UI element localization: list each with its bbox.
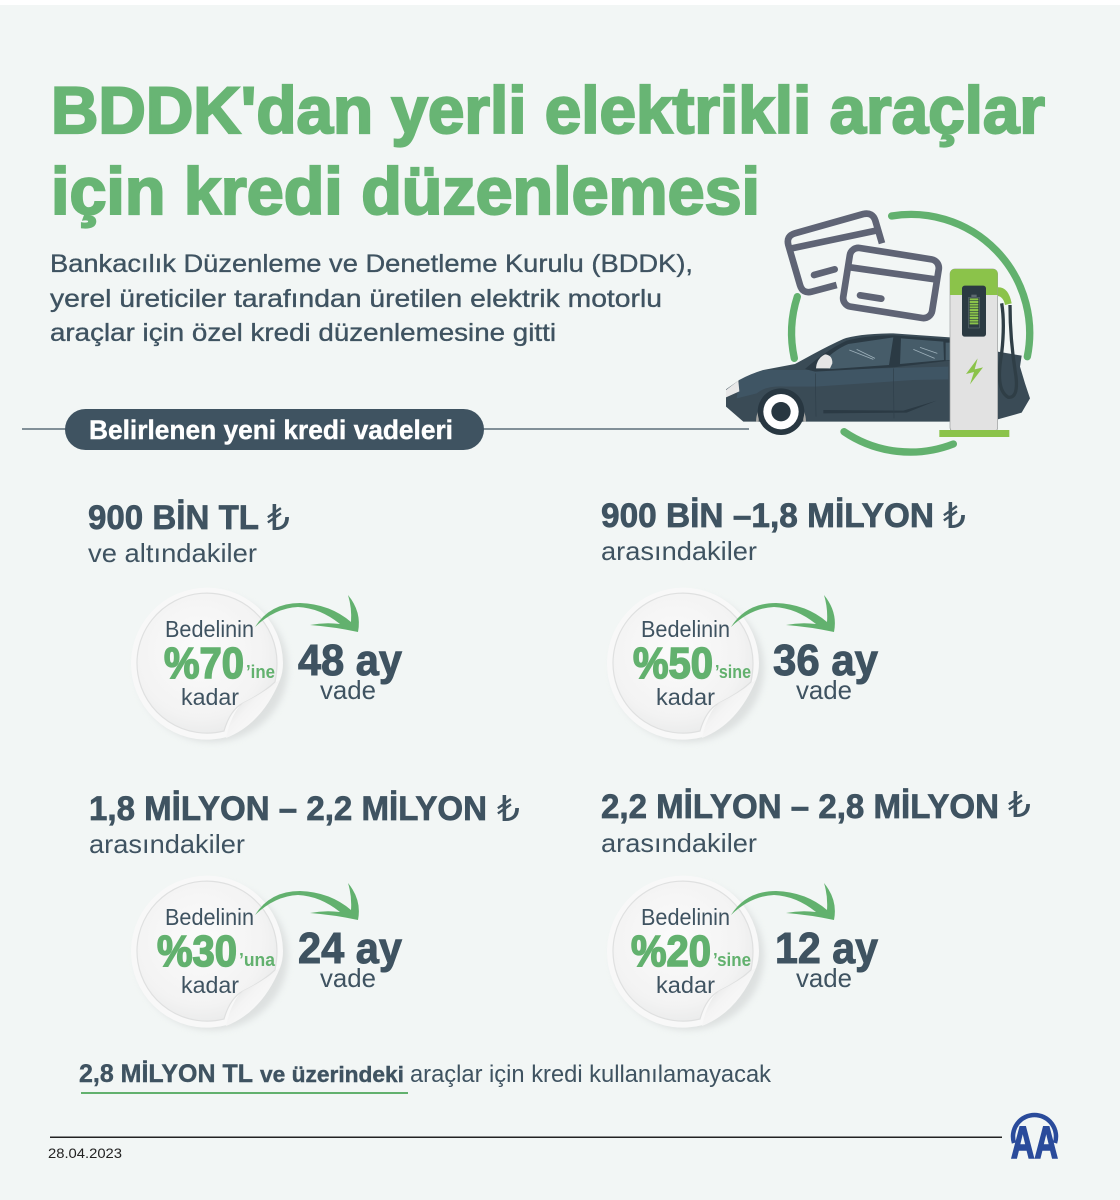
arrow (255, 883, 359, 920)
sticker badge: ’una (239, 950, 276, 970)
icon: green ring arcs (792, 214, 1030, 452)
sticker badge: Bedelinin (641, 616, 730, 642)
term: 12 ay (775, 924, 878, 973)
sticker badge: kadar (656, 684, 715, 710)
heading (88, 498, 290, 568)
heading: ₺ (1008, 785, 1031, 826)
sticker badge: ’sine (715, 662, 751, 682)
icon: hose (999, 303, 1016, 397)
icon: credit cards (788, 214, 940, 319)
heading (89, 789, 520, 859)
sticker badge: ’ine (246, 662, 275, 682)
heading: 900 BİN –1,8 MİLYON (601, 497, 934, 535)
sticker badge (607, 588, 764, 742)
term (773, 636, 879, 705)
term: vade (320, 963, 376, 993)
heading: ₺ (943, 496, 966, 537)
icon: charging station (939, 269, 1012, 437)
term: 48 ay (298, 636, 402, 685)
sticker badge: Bedelinin (641, 904, 730, 930)
heading: 1,8 MİLYON – 2,2 MİLYON (89, 790, 487, 828)
heading (601, 496, 966, 566)
sticker badge: %70 (164, 639, 244, 688)
sticker badge: kadar (181, 972, 239, 998)
term: vade (796, 963, 852, 993)
heading: ₺ (267, 498, 290, 539)
panel: 900 bin TL ve altı (88, 498, 402, 742)
intro text: yerel üreticiler tarafından üretilen elektrik motorlu (50, 285, 662, 313)
heading: arasındakiler (601, 536, 757, 566)
sticker badge: kadar (181, 684, 239, 710)
panel: 2,2 - 2,8 milyon (601, 785, 1031, 1030)
arrow (255, 595, 359, 632)
sticker badge: ’sine (713, 950, 751, 970)
footnote: araçlar için kredi kullanılamayacak (410, 1061, 772, 1088)
panel: 900 bin - 1,8 milyon (601, 496, 966, 742)
arrow (731, 595, 835, 632)
title (51, 73, 1045, 228)
sticker badge: %20 (631, 927, 711, 976)
sticker badge (131, 876, 288, 1030)
icon: car (726, 333, 1030, 435)
sticker badge (131, 588, 288, 742)
term: vade (796, 675, 852, 705)
intro text: araçlar için özel kredi düzenlemesine gitti (50, 319, 556, 347)
term: vade (320, 675, 376, 705)
sticker badge (607, 876, 764, 1030)
sticker badge: %50 (633, 639, 713, 688)
term: 24 ay (298, 924, 402, 973)
title: için kredi düzenlemesi (51, 154, 760, 228)
sticker badge: %30 (157, 927, 237, 976)
illustration: electric car, charger and credit cards (726, 214, 1030, 452)
heading: 2,2 MİLYON – 2,8 MİLYON (601, 788, 999, 826)
intro text: Bankacılık Düzenleme ve Denetleme Kurulu (BDDK), (50, 250, 693, 278)
heading: ₺ (497, 789, 520, 830)
footnote: 2,8 MİLYON TL (79, 1060, 253, 1088)
title: BDDK'dan yerli elektrikli araçlar (51, 73, 1045, 147)
section heading: Belirlenen yeni kredi vadeleri (89, 415, 453, 445)
heading: arasındakiler (601, 828, 757, 858)
term (298, 924, 402, 993)
heading: ve altındakiler (88, 538, 257, 568)
term: 36 ay (773, 636, 879, 685)
logo: AA: AA (1011, 1117, 1058, 1168)
heading: arasındakiler (89, 829, 245, 859)
heading (601, 785, 1031, 858)
footnote: ve üzerindeki (260, 1062, 404, 1087)
heading: 900 BİN TL (88, 499, 259, 537)
term (298, 636, 402, 705)
panel: 1,8 - 2,2 milyon (89, 789, 520, 1030)
term (775, 924, 878, 993)
intro text (50, 250, 693, 347)
sticker badge: Bedelinin (165, 616, 254, 642)
footnote (79, 1060, 772, 1094)
section heading (22, 409, 749, 450)
sticker badge: Bedelinin (165, 904, 254, 930)
date: 28.04.2023 (48, 1145, 122, 1161)
footer rule (50, 1136, 1002, 1138)
sticker badge: kadar (656, 972, 715, 998)
arrow (731, 883, 835, 920)
